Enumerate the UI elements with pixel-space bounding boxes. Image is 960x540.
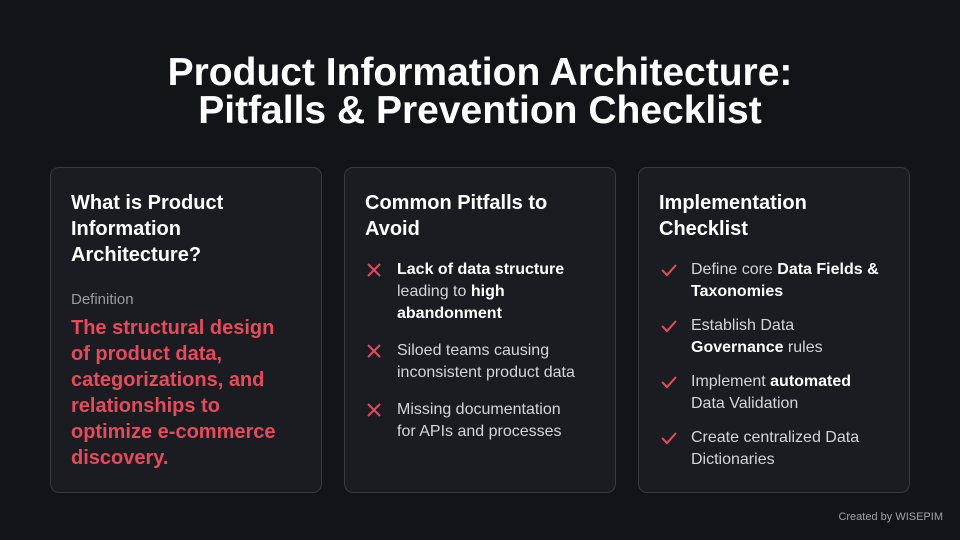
pitfall list <box>367 261 575 440</box>
text: definition body: The structural design of product data, categorizations, and relationships to optimize e-commerce discovery. <box>71 317 276 469</box>
pitfall 1: Lack of data structure leading to high abandonment <box>397 261 564 322</box>
checklist list <box>661 261 879 468</box>
panel: definition <box>50 167 322 493</box>
credit: Created by WISEPIM <box>838 511 943 523</box>
check 2: Establish Data Governance rules <box>691 317 823 356</box>
heading: checklist <box>659 192 807 240</box>
pitfall 3: Missing documentation for APIs and processes <box>397 401 562 440</box>
heading: what is PIA: What is Product <box>71 192 223 214</box>
panel: checklist <box>638 167 910 493</box>
panel: pitfalls <box>344 167 616 493</box>
label: definition: Definition <box>71 291 134 308</box>
heading: what is PIA: Architecture? <box>71 244 201 266</box>
title <box>168 51 792 132</box>
title: Product Information Architecture: <box>168 51 792 94</box>
heading: checklist: Checklist <box>659 218 748 240</box>
check 3: Implement automated Data Validation <box>691 373 851 412</box>
heading: what is PIA: Information <box>71 218 181 240</box>
check 1: Define core Data Fields & Taxonomies <box>691 261 879 300</box>
heading: pitfalls: Common Pitfalls to <box>365 192 547 214</box>
title: Pitfalls & Prevention Checklist <box>198 89 762 132</box>
heading: what is PIA <box>71 192 224 266</box>
heading: pitfalls <box>365 192 547 240</box>
check 4: Create centralized Data Dictionaries <box>691 429 859 468</box>
heading: checklist: Implementation <box>659 192 807 214</box>
heading: pitfalls: Avoid <box>365 218 420 240</box>
pitfall 2: Siloed teams causing inconsistent product data <box>397 342 575 381</box>
